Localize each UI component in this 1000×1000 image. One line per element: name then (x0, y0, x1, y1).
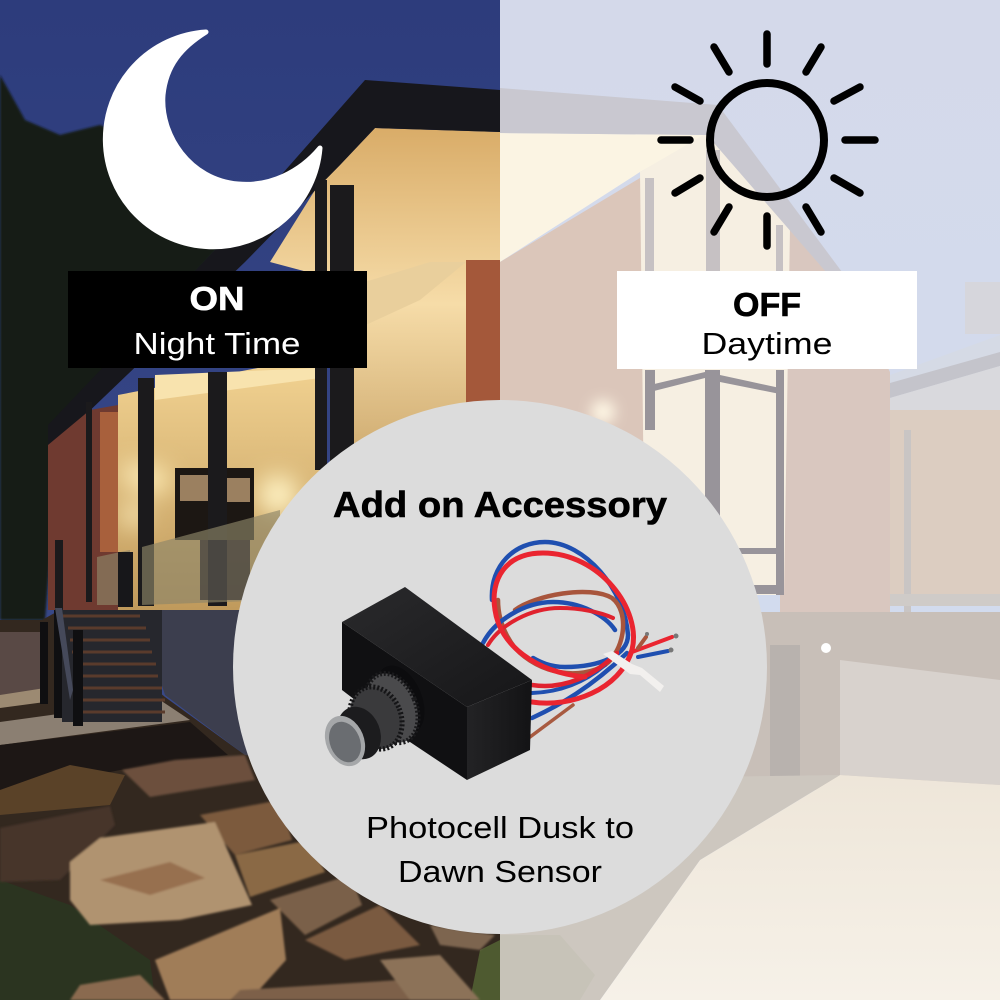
lower porch back wall (118, 355, 325, 610)
label: OFF daytime: OFF (733, 286, 801, 323)
ground (0, 610, 500, 1000)
upper window band (155, 368, 320, 400)
text: product name line 2: Dawn Sensor (398, 854, 602, 889)
retaining wall (840, 660, 1000, 785)
photo: wire terminals (645, 632, 678, 652)
label: ON night time: ON (190, 280, 244, 317)
photo: sensor lens (318, 658, 434, 772)
neighbouring building (890, 282, 1000, 612)
brick column (466, 260, 500, 405)
deck side (162, 610, 248, 756)
icon: crescent moon (105, 32, 320, 247)
glass balustrade (97, 510, 280, 605)
porch window (175, 468, 254, 540)
panel: accessory circle (233, 400, 767, 934)
porch columns (55, 180, 354, 610)
garden rocks (0, 755, 495, 1000)
label: ON night time: Night Time (134, 326, 300, 361)
label: ON night time (68, 271, 367, 368)
tree silhouette (0, 75, 240, 620)
rock at foot of driveway (500, 935, 595, 1000)
panel: night scene (0, 0, 500, 1000)
wall light glows (122, 463, 298, 527)
photo: sensor body (342, 587, 532, 780)
roof fascia (500, 88, 842, 272)
lower garage area (744, 612, 1000, 790)
icon: sun (661, 34, 875, 246)
left brick wall (500, 178, 644, 442)
tall window (640, 133, 790, 595)
ceiling edge detail (367, 274, 451, 324)
soffit (500, 133, 707, 262)
driveway (600, 775, 1000, 1000)
brick side wall (48, 405, 118, 610)
text: product name line 1: Photocell Dusk to (366, 810, 634, 845)
photo: cable tie (603, 651, 664, 692)
label: OFF daytime: Daytime (702, 326, 832, 361)
grass (0, 880, 155, 1000)
label: OFF daytime (617, 271, 917, 369)
roof edge and fascia (48, 80, 500, 448)
panel: day scene (500, 0, 1000, 1000)
wall light glow (591, 400, 615, 424)
right brick wall (780, 205, 890, 615)
heading: add on accessory: Add on Accessory (333, 484, 667, 525)
porch soffit and gable wall (270, 128, 500, 444)
photo: wires (483, 542, 672, 737)
deck stairs (40, 608, 165, 726)
